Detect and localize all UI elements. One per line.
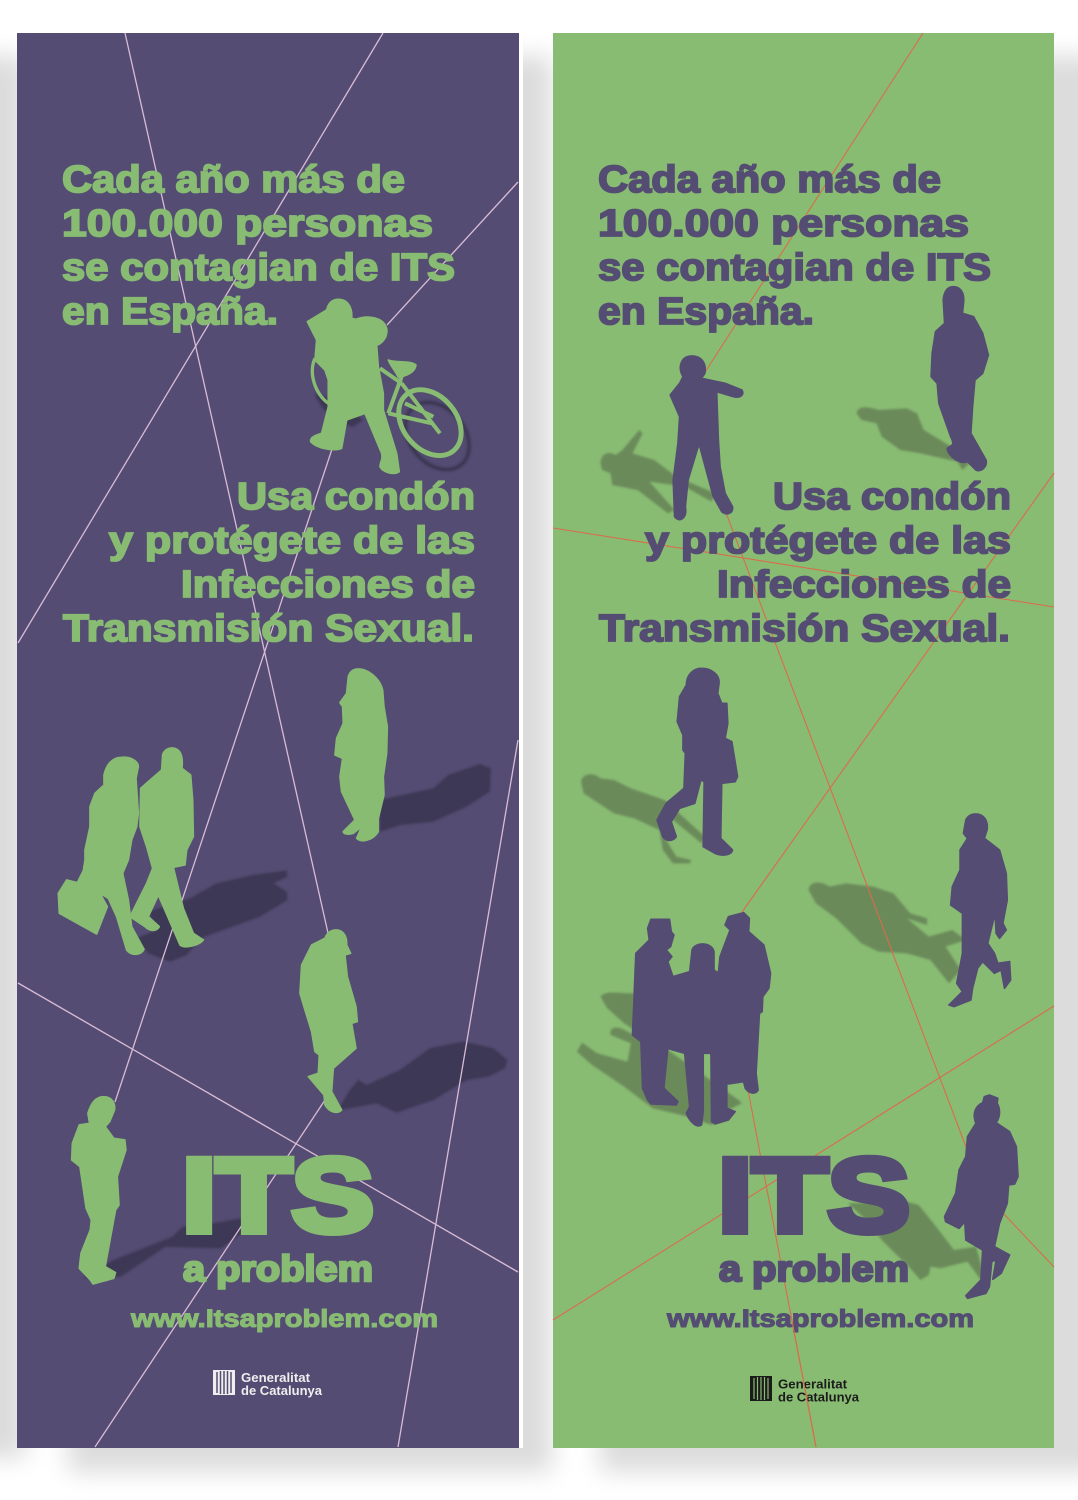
heading: yearly infections, green panel: Cada año más de: [598, 159, 941, 201]
website url, green panel: www.Itsaproblem.com: [666, 1305, 974, 1333]
heading: yearly infections, purple panel: Cada año más de: [62, 159, 405, 201]
network lines: green panel: [553, 33, 1054, 1447]
message: use a condom, purple panel: [63, 476, 475, 650]
logo: Generalitat de Catalunya, black: de Catalunya: [778, 1390, 860, 1404]
heading: yearly infections, purple panel: se contagian de ITS: [62, 247, 455, 289]
message: use a condom, green panel: Usa condón: [773, 476, 1011, 518]
panel: green bookmark: [553, 33, 1054, 1448]
logotype: ITS a problem, purple panel: a problem: [183, 1248, 373, 1289]
logo: Generalitat de Catalunya, white: de Catalunya: [241, 1384, 323, 1398]
logo: Generalitat de Catalunya, black: Generalitat: [778, 1378, 848, 1392]
figure: person with bicycle: [307, 299, 474, 473]
logotype: ITS a problem, green panel: ITS: [718, 1138, 910, 1254]
figures: pedestrians on purple panel: [58, 669, 387, 1112]
logo: Generalitat de Catalunya, white: [213, 1370, 323, 1398]
figure: standing person bottom left: [72, 1097, 126, 1284]
logotype: ITS a problem, green panel: [718, 1138, 910, 1289]
heading: yearly infections, green panel: [598, 159, 991, 333]
figure: woman with hair bun: [945, 1095, 1018, 1298]
panel: purple bookmark: [17, 33, 523, 1448]
heading: yearly infections, purple panel: en España.: [62, 291, 278, 333]
message: use a condom, green panel: Infecciones de: [717, 564, 1011, 606]
logotype: ITS a problem, green panel: a problem: [719, 1248, 909, 1289]
heading: yearly infections, green panel: en España.: [598, 291, 814, 333]
logo: Generalitat de Catalunya, black: [750, 1376, 860, 1404]
heading: yearly infections, purple panel: 100.000 personas: [62, 203, 433, 245]
message: use a condom, green panel: Transmisión Sexual.: [599, 608, 1010, 650]
message: use a condom, green panel: [599, 476, 1011, 650]
logo: Generalitat de Catalunya, white: Generalitat: [241, 1371, 311, 1385]
heading: yearly infections, green panel: se contagian de ITS: [598, 247, 991, 289]
logotype: ITS a problem, purple panel: ITS: [182, 1138, 374, 1254]
message: use a condom, purple panel: y protégete de las: [109, 520, 475, 562]
message: use a condom, purple panel: Usa condón: [237, 476, 475, 518]
message: use a condom, purple panel: Infecciones de: [181, 564, 475, 606]
line crossing over the logo: [790, 1310, 816, 1447]
figures: pointing person and standing man: [670, 287, 988, 520]
figures: woman with bag, walking man, group of three: [632, 668, 1011, 1126]
heading: yearly infections, purple panel: [62, 159, 455, 333]
message: use a condom, purple panel: Transmisión Sexual.: [63, 608, 474, 650]
heading: yearly infections, green panel: 100.000 personas: [598, 203, 969, 245]
website url, purple panel: www.Itsaproblem.com: [130, 1305, 438, 1333]
logotype: ITS a problem, purple panel: [182, 1138, 374, 1289]
network lines: purple panel: [18, 33, 518, 1447]
cast shadows: green panel: [577, 407, 983, 1280]
cast shadows: purple panel: [83, 390, 507, 1278]
message: use a condom, green panel: y protégete de las: [645, 520, 1011, 562]
